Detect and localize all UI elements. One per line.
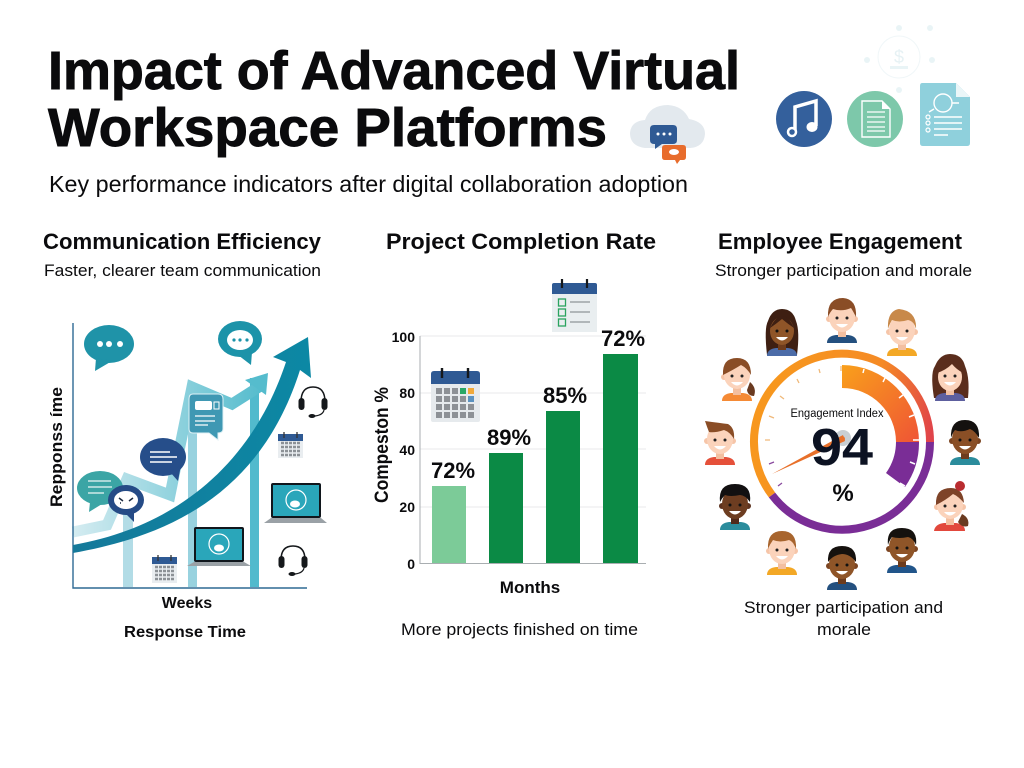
caption: morale xyxy=(817,620,871,639)
avatar: lower left 1 xyxy=(766,531,798,575)
axes xyxy=(73,323,307,588)
gauge value: 94 xyxy=(811,419,873,477)
subheading: engagement: Stronger participation and morale xyxy=(715,261,972,280)
bar labels: 85% xyxy=(543,383,587,408)
avatar: right xyxy=(949,420,981,465)
gauge outer ring xyxy=(754,354,930,530)
icon: navy bubble xyxy=(140,438,186,481)
panel: engagement gauge xyxy=(704,298,981,639)
icon: headset upper xyxy=(298,387,328,418)
rising line with pillars xyxy=(73,373,268,587)
bar labels xyxy=(431,326,645,483)
axes xyxy=(420,336,646,564)
icon: teal bubble top left xyxy=(84,325,134,371)
y ticks: 0 xyxy=(407,556,415,572)
avatar: lower right 2 xyxy=(886,528,918,573)
icon: calendar xyxy=(431,368,480,422)
icon: cloud with chat bubbles xyxy=(630,105,705,164)
icon: laptop right xyxy=(264,483,327,523)
icon: checklist calendar xyxy=(552,279,597,332)
bar 2 xyxy=(489,453,523,563)
gauge percent sign: % xyxy=(832,480,854,507)
panel: response time chart xyxy=(47,321,328,641)
icon: music note xyxy=(776,91,832,147)
subtitle: Key performance indicators after digital collaboration adoption xyxy=(49,171,688,197)
y ticks: 20 xyxy=(399,499,415,515)
needle xyxy=(772,430,851,474)
x axis label: Months xyxy=(500,578,560,597)
bar labels: 72% xyxy=(601,326,645,351)
avatar: upper right 2 xyxy=(932,354,969,401)
icon: faint dollar network xyxy=(864,25,935,93)
icon: navy face bubble xyxy=(108,485,144,522)
icon: teal lined bubble xyxy=(77,471,123,512)
caption xyxy=(744,598,943,639)
title: Workspace Platforms xyxy=(48,98,607,158)
y ticks: 100 xyxy=(392,329,415,345)
icon: laptop lower xyxy=(187,527,251,566)
avatar: upper right 1 xyxy=(886,309,918,356)
bar 4 xyxy=(603,354,638,563)
bar labels: 89% xyxy=(487,425,531,450)
heading: employee engagement: Employee Engagement xyxy=(718,229,963,254)
bar 3 xyxy=(546,411,580,563)
avatar: lower left 2 xyxy=(719,484,751,530)
panel: project completion chart xyxy=(372,279,646,639)
heading: project completion: Project Completion Rate xyxy=(386,229,656,254)
bar labels: 72% xyxy=(431,458,475,483)
subheading: communication: Faster, clearer team communication xyxy=(44,261,321,280)
x axis label: Weeks xyxy=(162,595,212,612)
chart caption: More projects finished on time xyxy=(401,621,638,639)
y axis label: Repponss íme xyxy=(47,387,66,507)
y ticks: 40 xyxy=(399,442,415,458)
gridlines xyxy=(420,336,646,507)
bar 1 xyxy=(432,486,466,563)
avatar: top xyxy=(826,298,858,343)
gauge inner arc xyxy=(842,365,919,487)
caption: Stronger participation and xyxy=(744,598,943,617)
title: Impact of Advanced Virtual xyxy=(48,41,740,101)
title xyxy=(48,41,740,158)
icon: document bubble xyxy=(189,394,223,440)
y axis label: Compeston % xyxy=(372,387,393,503)
icon: faint dollar network: $ xyxy=(894,47,904,67)
main arrow xyxy=(73,337,311,553)
avatar: upper left 1 xyxy=(721,358,755,401)
y ticks xyxy=(392,329,415,572)
avatar: left xyxy=(704,421,736,465)
avatar: bottom xyxy=(826,546,858,590)
avatar: upper left 2 xyxy=(766,309,798,356)
icon: teal bubble top right xyxy=(218,321,262,365)
icon: small calendar lower xyxy=(152,555,177,583)
gauge label: Engagement Index xyxy=(790,408,884,420)
icon: small calendar upper xyxy=(278,432,303,458)
icon: blue document xyxy=(920,83,970,146)
avatar: lower right 1 xyxy=(934,481,968,531)
y ticks: 80 xyxy=(399,385,415,401)
chart caption: Response Time xyxy=(124,624,246,641)
gauge ticks on arc xyxy=(863,369,919,486)
icon: green document xyxy=(847,91,903,147)
heading: communication efficiency: Communication Efficiency xyxy=(43,229,322,254)
gauge ticks on dial xyxy=(765,366,841,486)
icon: headset lower xyxy=(278,546,308,576)
